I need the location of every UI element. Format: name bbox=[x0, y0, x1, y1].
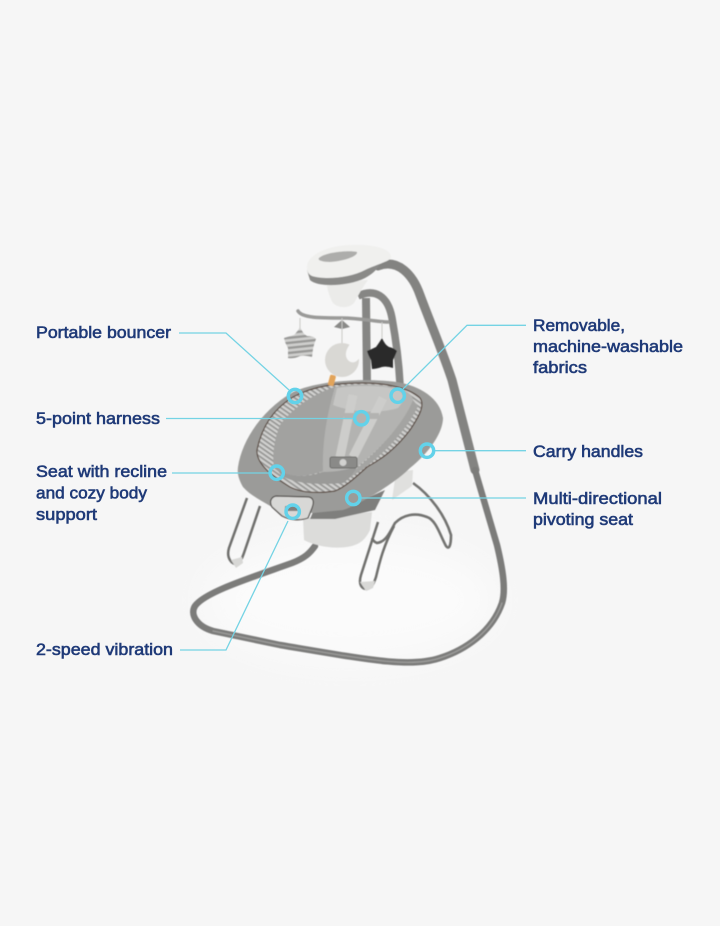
overhead control head bbox=[307, 245, 391, 307]
seat underside bbox=[310, 490, 385, 519]
head pad bbox=[333, 386, 403, 412]
mobile hub bbox=[334, 320, 350, 329]
rear pivot leg bbox=[372, 483, 451, 548]
vibration base unit bbox=[303, 512, 372, 548]
seat shell bbox=[238, 380, 443, 513]
toy mobile bbox=[284, 311, 397, 387]
seat side support bbox=[392, 470, 413, 500]
callout: Removable, machine-washable fabrics: machine-washable bbox=[533, 337, 683, 356]
harness buckle bbox=[330, 457, 357, 468]
callout: Seat with recline and cozy body support bbox=[36, 462, 283, 524]
callout: 5-point harness bbox=[36, 409, 368, 428]
hanging strings bbox=[300, 318, 382, 343]
white cap bbox=[307, 245, 391, 278]
callout: Seat with recline and cozy body support: and cozy body bbox=[36, 484, 147, 502]
swing frame arm and base bbox=[193, 264, 504, 662]
left body support bolster bbox=[273, 387, 335, 476]
callout: Seat with recline and cozy body support: Seat with recline bbox=[36, 462, 167, 481]
callout: Multi-directional pivoting seat: pivoting seat bbox=[533, 510, 633, 529]
callout: Portable bouncer bbox=[36, 323, 302, 403]
control buttons bbox=[319, 251, 357, 262]
callout: Removable, machine-washable fabrics: fabrics bbox=[533, 358, 587, 377]
gray band bbox=[307, 258, 385, 285]
rear arch of frame bbox=[358, 293, 400, 384]
callout: 2-speed vibration: 2-speed vibration bbox=[36, 640, 173, 659]
white backdrop glow around product bbox=[205, 540, 495, 660]
callout: Seat with recline and cozy body support: support bbox=[36, 505, 97, 524]
mobile bar bbox=[298, 311, 388, 322]
callout: Removable, machine-washable fabrics: Removable, bbox=[533, 316, 625, 335]
funnel bbox=[326, 280, 368, 307]
striped star toy bbox=[284, 327, 316, 358]
left front leg bbox=[228, 498, 260, 568]
seat bottom cushion bbox=[274, 466, 357, 484]
black star toy bbox=[367, 338, 397, 369]
harness straps bbox=[340, 395, 383, 457]
callout: Portable bouncer: Portable bouncer bbox=[36, 323, 171, 342]
product: bouncer swing bbox=[193, 245, 504, 662]
callout: Removable, machine-washable fabrics bbox=[391, 316, 683, 402]
callout: Multi-directional pivoting seat: Multi-directional bbox=[533, 489, 662, 508]
callout: 5-point harness: 5-point harness bbox=[36, 409, 160, 428]
control panel bbox=[271, 496, 313, 520]
right front leg bbox=[360, 522, 394, 591]
callout: 2-speed vibration bbox=[36, 505, 299, 659]
moon toy bbox=[325, 342, 361, 377]
callout: Carry handles: Carry handles bbox=[533, 442, 643, 461]
striped inner rim bbox=[257, 383, 422, 492]
seat back cushion bbox=[320, 385, 413, 482]
right body support bolster bbox=[345, 400, 418, 480]
callout: Multi-directional pivoting seat bbox=[347, 489, 662, 529]
callout: Carry handles bbox=[420, 442, 643, 461]
orange teether bbox=[328, 374, 336, 387]
